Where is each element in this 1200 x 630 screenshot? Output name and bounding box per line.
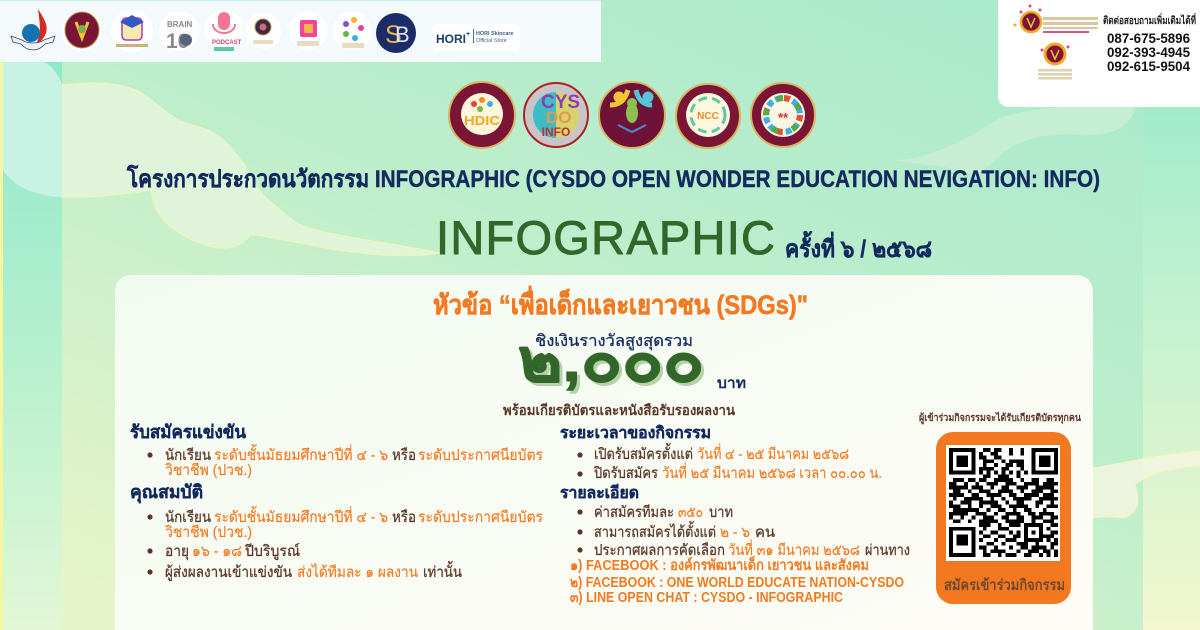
bullet text: หรือ <box>392 447 416 464</box>
bullet: submission: เท่านั้น <box>423 561 462 581</box>
phone numbers: 087-675-5896 <box>1107 31 1190 46</box>
logo: SDG wheel: ** <box>778 110 789 125</box>
bullet: student level: นักเรียน <box>165 509 211 526</box>
bullet: announcement: วันที่ ๓๑ มีนาคม ๒๕๖๘ <box>728 539 860 559</box>
infographic wordmark: INFOGRAPHIC <box>436 211 775 264</box>
topic heading: หัวข้อ “เพื่อเด็กและเยาวชน (SDGs)" <box>433 285 808 320</box>
bullet: team size: สามารถสมัครได้ตั้งแต่ <box>594 521 716 541</box>
logo: small round badge <box>245 13 281 49</box>
logo: maroon badge <box>62 11 102 51</box>
bullet text: ระดับชั้นมัธยมศึกษาปีที่ ๔ - ๖ <box>214 444 388 464</box>
bullet text: วิชาชีพ (ปวช.) <box>164 462 252 479</box>
logo: SB navy seal <box>376 13 416 53</box>
bullet: open: เปิดรับสมัครตั้งแต่ <box>594 443 693 463</box>
bullet text: ระดับประกาศนียบัตร <box>418 447 543 464</box>
bullet: submission: ส่งได้ทีมละ ๑ ผลงาน <box>297 563 418 581</box>
QR code <box>949 448 1058 557</box>
bullet: age: ๑๖ - ๑๘ <box>192 543 242 560</box>
cloud: left swirl <box>3 62 440 256</box>
bullet: close <box>577 462 882 482</box>
logo: brain 10: 10 <box>166 30 189 53</box>
logo: HORI store <box>432 24 520 51</box>
logo: HDIC <box>449 82 515 148</box>
bullet: team size: ๒ - ๖ <box>720 524 750 541</box>
logo: brain 10: BRAIN <box>167 20 193 29</box>
bullet: submission <box>147 561 462 581</box>
bullet: open: วันที่ ๔ - ๒๕ มีนาคม ๒๕๖๘ <box>697 443 849 463</box>
logo: brain 10 <box>159 11 199 53</box>
top left logo strip <box>0 0 601 62</box>
bullet: close: ปิดรับสมัคร <box>593 465 658 482</box>
bullet: age <box>147 543 300 561</box>
QR caption: สมัครเข้าร่วมกิจกรรม <box>944 576 1065 594</box>
section: details <box>560 483 910 606</box>
currency: บาท <box>717 375 746 392</box>
certificate note: ผู้เข้าร่วมกิจกรรมจะได้รับเกียรติบัตรทุกคน <box>919 411 1081 425</box>
logo: SDG wheel <box>751 83 815 147</box>
logo: CYSDO INFO <box>524 83 588 147</box>
logo: HORI store: HORI Skincare <box>476 31 513 37</box>
bullet text: นักเรียน <box>165 447 211 464</box>
bullet: announcement <box>577 539 910 559</box>
logo: SB navy seal: B <box>395 22 410 47</box>
heading: คุณสมบัติ <box>130 482 203 504</box>
bullet text <box>147 444 543 479</box>
logo: HORI store: HORI <box>436 32 466 46</box>
bullet: announcement: ผ่านทาง <box>865 542 910 559</box>
bullet: fee <box>577 504 733 521</box>
QR card <box>936 432 1071 604</box>
logo: HORI store: Official Store <box>476 38 507 44</box>
bullet: fee: บาท <box>709 504 733 521</box>
prize amount: ๒,๐๐๐ <box>521 330 707 397</box>
prize block <box>503 327 746 418</box>
edition: ครั้งที่ ๖ / ๒๕๖๘ <box>785 230 932 263</box>
bullet: fee: ค่าสมัครทีมละ <box>594 504 674 521</box>
cloud: right wisp <box>892 106 1135 175</box>
logo: NCC: NCC <box>697 111 719 122</box>
bullet: student level: ระดับชั้นมัธยมศึกษาปีที่ ๔ - ๖ <box>214 506 388 526</box>
phone numbers: 092-615-9504 <box>1107 59 1190 74</box>
logo: contact office <box>1038 44 1072 80</box>
logo: maroon people <box>599 82 665 148</box>
logo: CYSDO INFO: DO <box>546 108 572 127</box>
logo: podcast: PODCAST <box>212 40 242 46</box>
logo: SB navy seal: S <box>385 21 402 49</box>
bullet: announcement: ประกาศผลการคัดเลือก <box>594 542 725 559</box>
section: schedule <box>560 424 882 482</box>
logo: graduation shield <box>111 10 153 52</box>
logo: NCC <box>676 84 740 148</box>
heading: รายละเอียด <box>560 483 639 502</box>
bullet: age: อายุ <box>165 543 189 561</box>
bullet: age: ปีบริบูรณ์ <box>244 543 300 560</box>
heading: รับสมัครแข่งขัน <box>130 422 247 442</box>
bullet: team size <box>577 521 775 541</box>
logo: colorful circle of people <box>333 12 371 50</box>
bullet: student level: วิชาชีพ (ปวช.) <box>164 524 252 541</box>
bullet: open <box>577 443 849 463</box>
bullet: student level: หรือ <box>392 509 416 526</box>
bullet: student level: ระดับประกาศนียบัตร <box>418 509 543 526</box>
section: qualifications <box>130 482 543 581</box>
partner logos row <box>449 82 815 148</box>
announcement channels: ๓) LINE OPEN CHAT : CYSDO - INFOGRAPHIC <box>570 590 843 606</box>
announcement channels: ๒) FACEBOOK : ONE WORLD EDUCATE NATION-CYSDO <box>570 575 904 591</box>
prize label: ชิงเงินรางวัลสูงสุดรวม <box>535 333 693 351</box>
logo: pink square badge <box>289 12 327 50</box>
prize amount: ๒,๐๐๐ <box>518 327 704 394</box>
logo: HORI store: + <box>466 31 470 38</box>
main card <box>115 275 1093 630</box>
logo: CYSDO INFO: INFO <box>542 125 570 139</box>
heading: ระยะเวลาของกิจกรรม <box>560 424 711 442</box>
logo: contact department <box>1014 4 1098 33</box>
logo: HDIC: HDIC <box>464 113 501 128</box>
bullet: team size: คน <box>755 524 775 541</box>
bullet: fee: ๓๕๐ <box>678 504 703 521</box>
logo: CYSDO INFO: CYS <box>541 92 580 113</box>
bullet: student level <box>147 506 543 541</box>
bullet: submission: ผู้ส่งผลงานเข้าแข่งขัน <box>165 564 292 581</box>
logo: flame emblem <box>11 9 55 50</box>
announcement channels <box>570 555 904 606</box>
contact card <box>998 0 1200 107</box>
bullet: close: วันที่ ๒๕ มีนาคม ๒๕๖๘ เวลา ๐๐.๐๐ น. <box>662 462 882 482</box>
prize note: พร้อมเกียรติบัตรและหนังสือรับรองผลงาน <box>503 402 735 418</box>
phone numbers: 092-393-4945 <box>1107 45 1190 60</box>
section: registration <box>130 422 543 479</box>
announcement channels: ๑) FACEBOOK : องค์กรพัฒนาเด็ก เยาวชน และสังคม <box>570 555 869 574</box>
cloud: lower right <box>1093 451 1200 518</box>
phone numbers <box>1107 31 1190 74</box>
logo: podcast <box>204 10 244 51</box>
